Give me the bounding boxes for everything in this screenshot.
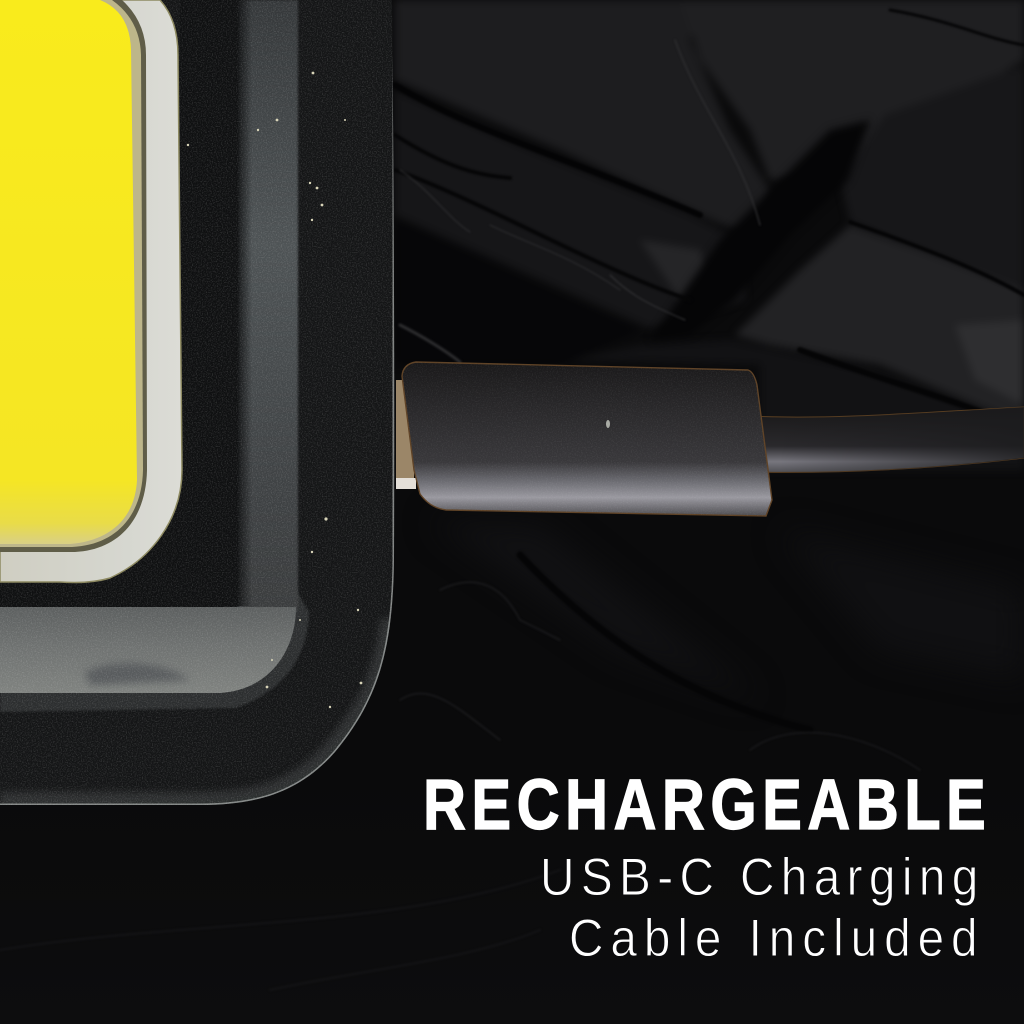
- device outer shell: [0, 0, 394, 805]
- lens inner gasket: [0, 0, 147, 552]
- metal plug tip: [396, 380, 416, 489]
- inner dark panel: [0, 0, 240, 607]
- device: work light body: [0, 0, 400, 810]
- lens: yellow cob panel with clear frame: [0, 0, 182, 582]
- dust specks: [187, 72, 362, 708]
- connector housing: [400, 360, 775, 520]
- raised inner ridge: [0, 0, 309, 712]
- headline text block: [423, 765, 986, 968]
- shell lighter rim: [0, 0, 394, 805]
- heading: rechargeable: RECHARGEABLE: [423, 765, 986, 844]
- subheading line 2: Cable Included: [569, 908, 978, 968]
- connector glint: [606, 420, 610, 428]
- device surface speckle: [0, 0, 400, 810]
- usb-c charging cable: [396, 360, 1024, 520]
- cable cord: [750, 407, 1024, 473]
- lens tan reflection: [0, 0, 143, 547]
- yellow led panel: [0, 0, 137, 544]
- subheading line 1: USB-C Charging: [540, 847, 978, 907]
- lens clear frame: [0, 0, 182, 582]
- dark fissure: [650, 120, 870, 340]
